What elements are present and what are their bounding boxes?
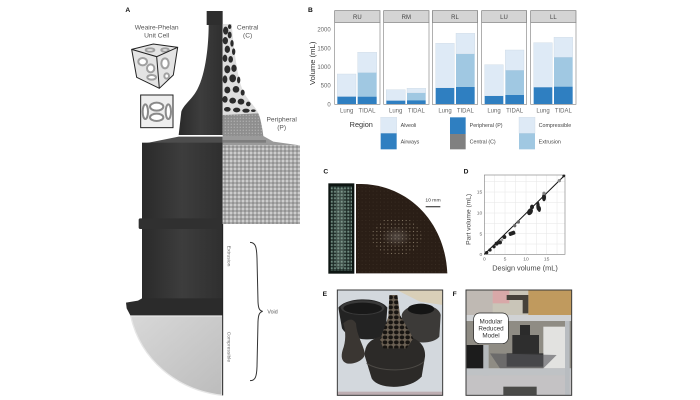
- void brace: [250, 242, 263, 381]
- facet RM: RM: [402, 15, 411, 21]
- legend: Compressible: [539, 123, 571, 129]
- facet RU: RU: [353, 15, 362, 21]
- panel label A: A: [125, 7, 130, 14]
- solid left half of model: [126, 11, 223, 395]
- facet LL: [531, 11, 576, 115]
- extrusion label: Extrusion: [225, 246, 231, 267]
- x axis title: Design volume (mL): [492, 264, 558, 273]
- panel C: printed lattice photos: [323, 168, 447, 274]
- central lattice: [222, 24, 258, 115]
- facet RM: [384, 11, 429, 115]
- void label: Void: [267, 310, 278, 316]
- central label: Central: [237, 25, 258, 32]
- y axis title: Part volume (mL): [466, 194, 473, 245]
- legend: Region: [350, 120, 373, 129]
- panel B: stacked bar chart: [308, 7, 576, 149]
- panel F: photo of modular reduced model: [453, 290, 572, 395]
- facet LU: LU: [500, 15, 508, 21]
- centre divider: [221, 224, 224, 395]
- facet LL: TIDAL: [555, 109, 572, 115]
- unit cell square view icon: [141, 95, 173, 128]
- panel label C: C: [323, 168, 328, 175]
- legend: Alveoli: [401, 123, 416, 129]
- legend: Airways: [401, 139, 420, 145]
- unit cell title: Unit Cell: [144, 33, 170, 40]
- facet LU: [482, 11, 527, 115]
- panel label F: F: [453, 291, 457, 298]
- quarter section photo: [356, 184, 447, 273]
- model callout: Reduced: [478, 325, 504, 332]
- unit cell cube icon: [132, 44, 178, 88]
- photo: [337, 290, 443, 395]
- plot grid: [484, 175, 565, 254]
- panel label B: B: [308, 7, 313, 14]
- panel label E: E: [323, 291, 328, 298]
- y axis: [308, 28, 331, 108]
- scale bar: 10 mm: [425, 197, 441, 203]
- identity line: [484, 175, 565, 254]
- model callout: [474, 313, 508, 344]
- central label: (C): [243, 33, 252, 40]
- facet RU: Lung: [340, 109, 353, 115]
- photo: [466, 290, 572, 395]
- facet RU: TIDAL: [359, 109, 376, 115]
- axis ticks: [477, 190, 550, 263]
- y axis: 500: [321, 84, 331, 90]
- facet RM: TIDAL: [408, 109, 425, 115]
- facet RL: RL: [451, 15, 459, 21]
- peripheral label: Peripheral: [266, 117, 297, 124]
- legend: Peripheral (P): [470, 123, 503, 129]
- facet LL: Lung: [536, 109, 550, 115]
- unit cell title: Weaire-Phelan: [135, 25, 179, 32]
- model callout: Model: [482, 332, 500, 339]
- y axis: 0: [327, 102, 331, 108]
- data points: [485, 175, 565, 254]
- axis ticks: 5: [504, 257, 507, 263]
- panel D: scatter plot: [464, 168, 565, 273]
- side view photo: [328, 183, 354, 274]
- y axis: 2000: [317, 28, 331, 34]
- facet RL: TIDAL: [457, 109, 474, 115]
- facet RL: [432, 11, 478, 115]
- axis ticks: 15: [544, 257, 550, 263]
- legend: Extrusion: [539, 139, 561, 145]
- panel E: photo of printed parts: [323, 290, 443, 395]
- compressible label: Compressible: [225, 332, 231, 362]
- facet LL: LL: [550, 15, 557, 21]
- y axis: 1500: [317, 46, 331, 52]
- axis ticks: 0: [483, 257, 486, 263]
- y axis title: Volume (mL): [308, 41, 317, 85]
- facet RM: Lung: [389, 109, 402, 115]
- axis ticks: 10: [523, 257, 529, 263]
- facet LU: Lung: [487, 109, 501, 115]
- legend: [350, 117, 571, 149]
- axis ticks: 5: [480, 231, 483, 237]
- model callout: Modular: [480, 318, 502, 325]
- facet LU: TIDAL: [506, 109, 524, 115]
- facet RL: Lung: [438, 109, 452, 115]
- panel A: lattice lung model: [125, 7, 300, 395]
- axis ticks: 0: [480, 252, 483, 258]
- peripheral label: (P): [277, 125, 286, 132]
- axis ticks: 15: [477, 190, 483, 196]
- panel label D: D: [464, 168, 469, 175]
- legend: Central (C): [470, 139, 496, 145]
- axis ticks: 10: [477, 211, 483, 217]
- peripheral lattice: [223, 113, 300, 224]
- y axis: 1000: [317, 65, 331, 71]
- facet RU: [335, 11, 380, 115]
